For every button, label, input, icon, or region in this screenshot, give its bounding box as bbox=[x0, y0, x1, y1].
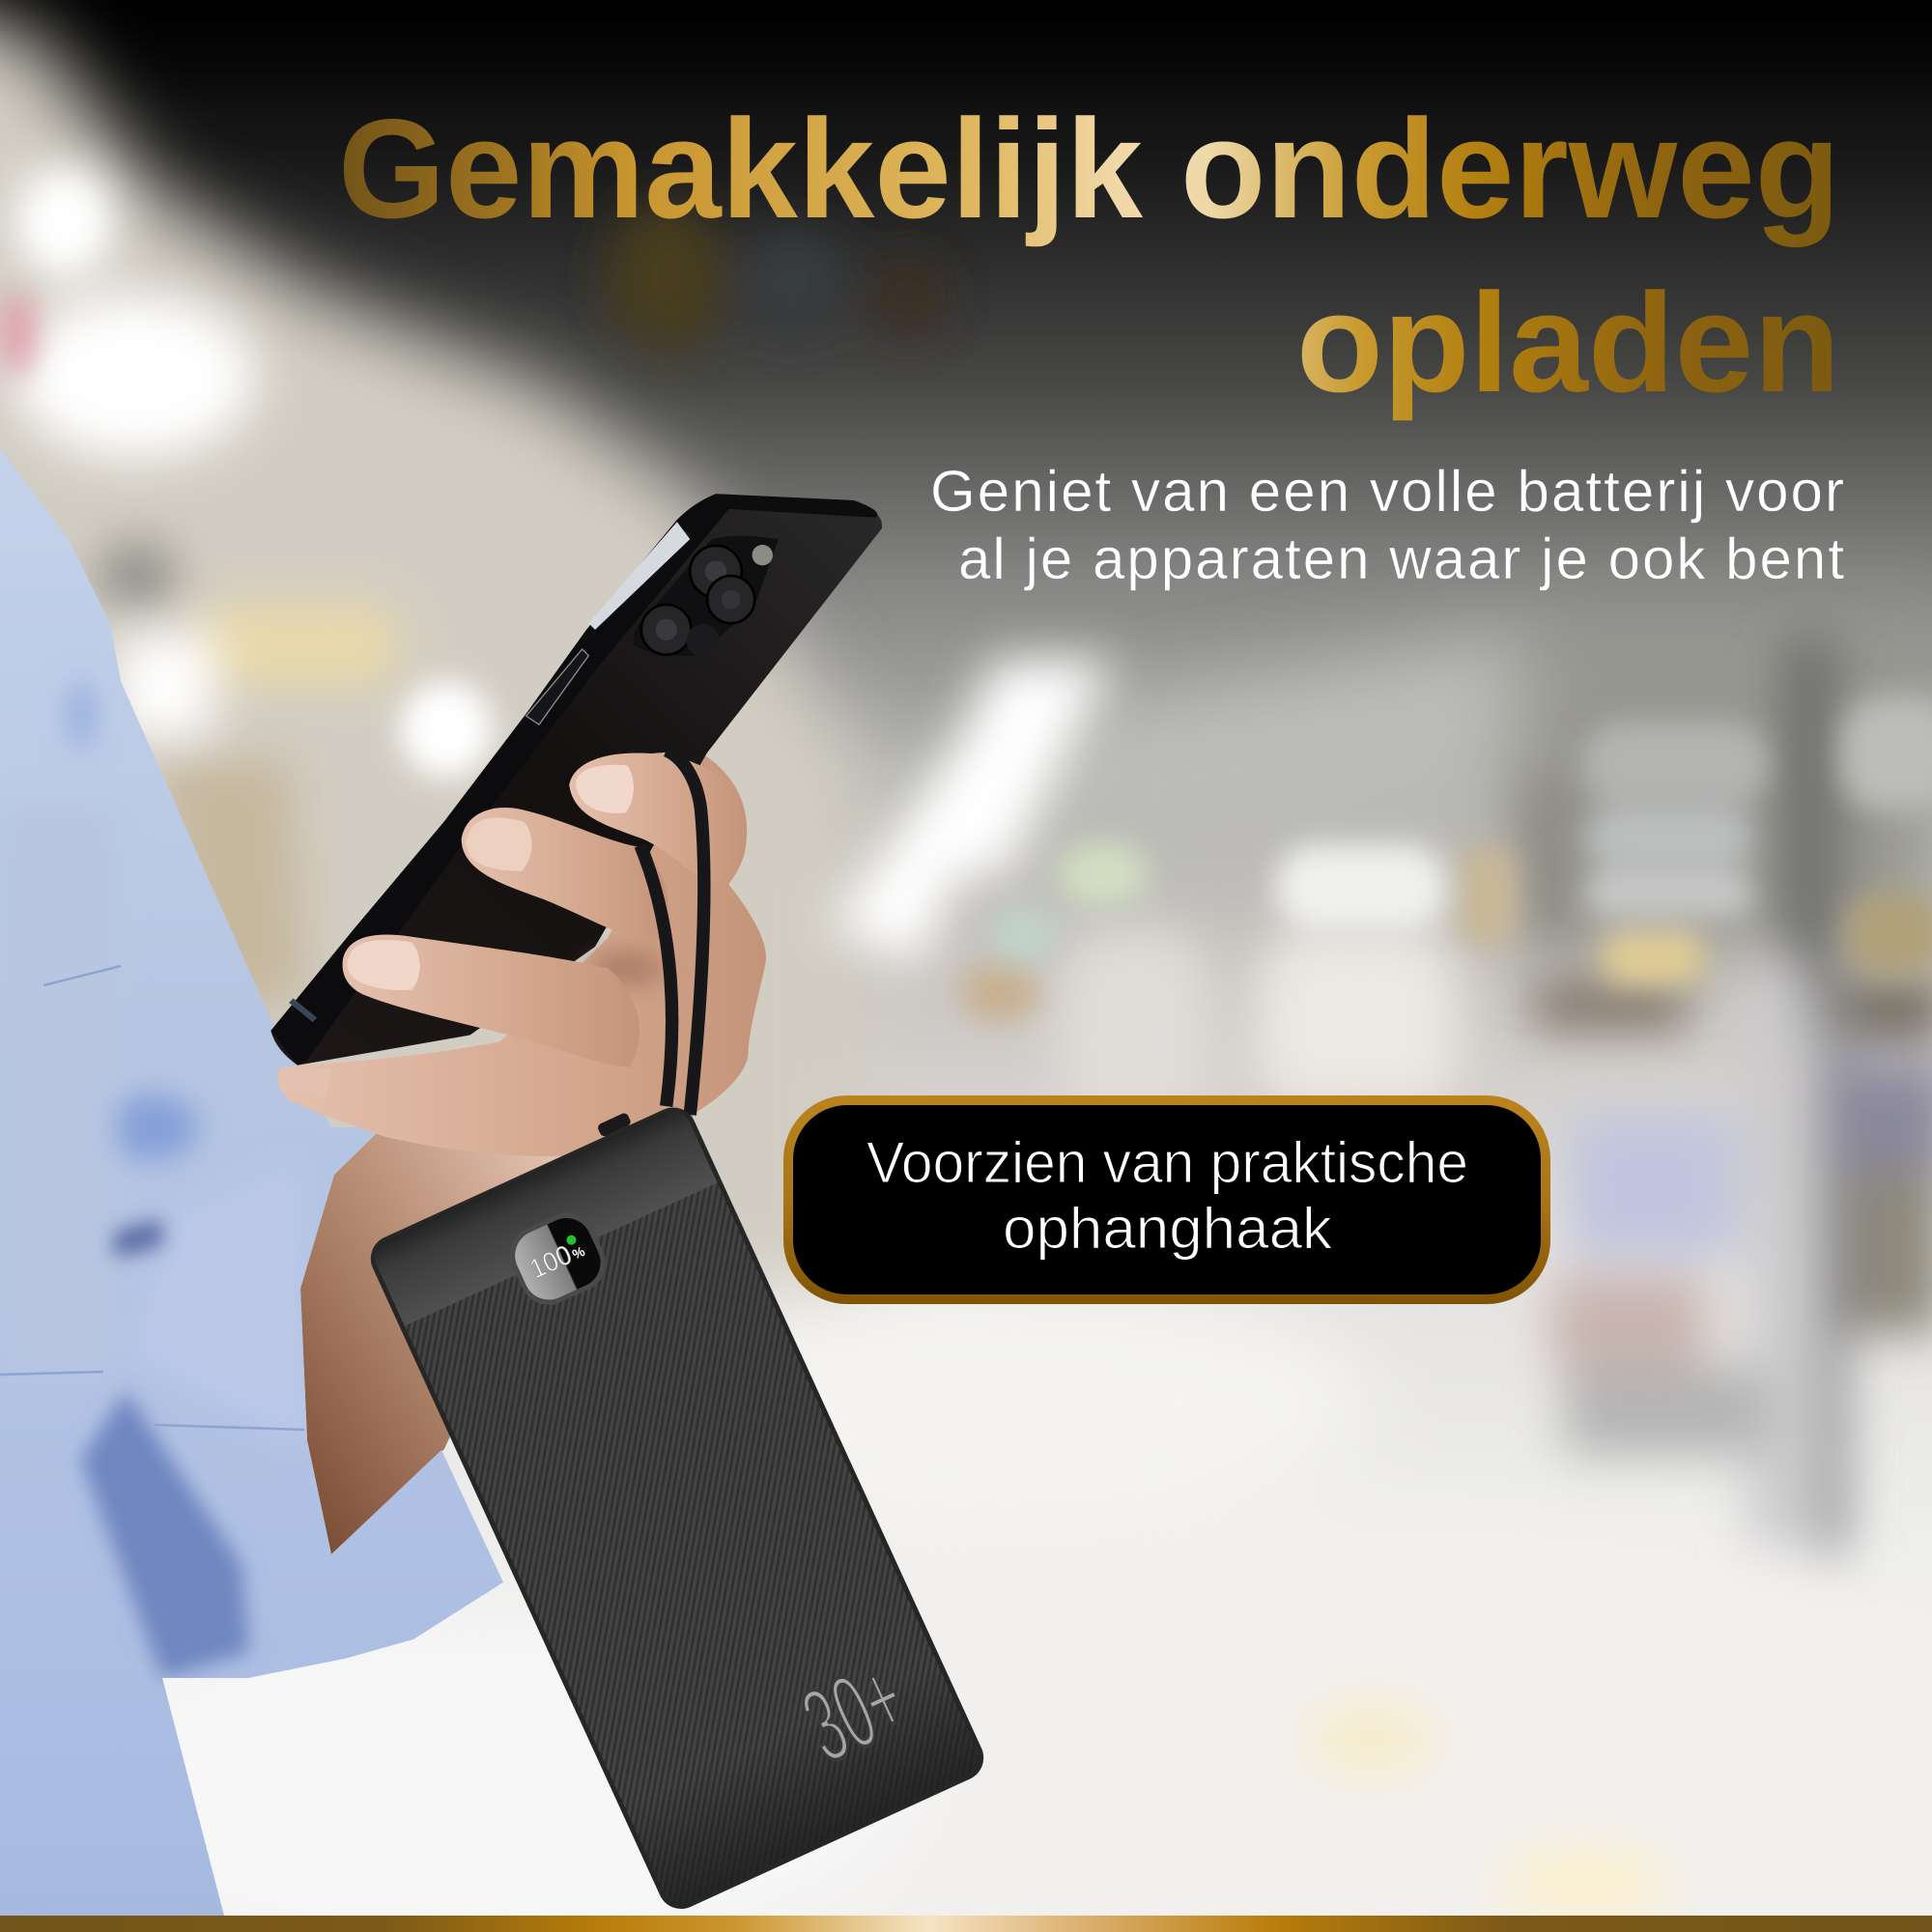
subtitle: Geniet van een volle batterij voor bbox=[930, 459, 1844, 524]
palm shadow bbox=[586, 951, 664, 985]
callout: ophanghaak bbox=[1003, 1196, 1333, 1261]
title: Gemakkelijk bbox=[338, 90, 1144, 247]
bottom gold bar bbox=[0, 1916, 1932, 1932]
phone bbox=[270, 494, 882, 1065]
capacity mark: 30+ bbox=[787, 1639, 922, 1785]
lower finger bbox=[343, 935, 639, 1067]
smooth upper band bbox=[369, 1104, 718, 1326]
display bbox=[500, 1204, 615, 1315]
bottom finger nail bbox=[281, 1067, 332, 1097]
subtitle: al je apparaten waar je ook bent bbox=[958, 526, 1844, 591]
strap anchor bbox=[596, 1112, 632, 1138]
display: % bbox=[570, 1243, 587, 1263]
shirt bbox=[0, 449, 503, 1916]
top finger bbox=[569, 752, 747, 882]
cable strap bbox=[640, 751, 704, 1115]
display: 100 bbox=[525, 1239, 576, 1284]
title bbox=[338, 90, 1840, 421]
camera module bbox=[633, 536, 779, 657]
middle finger bbox=[462, 808, 668, 943]
title: opladen bbox=[1296, 264, 1840, 421]
power bank bbox=[357, 1088, 991, 1917]
hand and phone bbox=[270, 494, 882, 1156]
callout: Voorzien van praktische bbox=[867, 1130, 1468, 1195]
subtitle bbox=[930, 459, 1844, 591]
palm bbox=[277, 753, 766, 1156]
title: onderweg bbox=[1180, 90, 1840, 247]
callout bbox=[783, 1095, 1550, 1304]
arm bbox=[300, 1127, 580, 1554]
